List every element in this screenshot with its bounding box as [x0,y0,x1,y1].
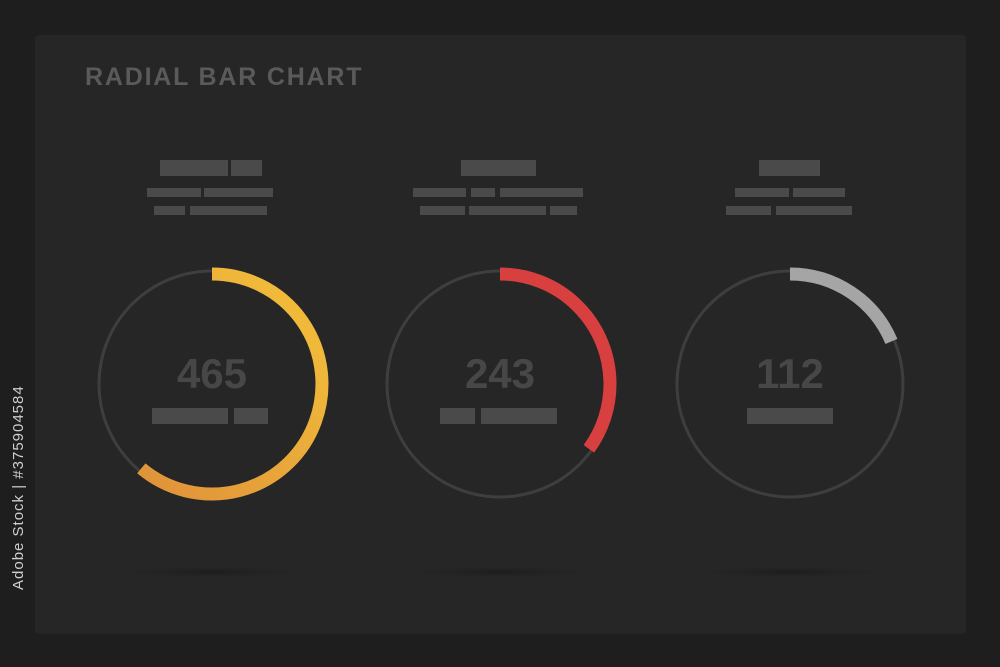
chart 2: 243: 243 [465,350,535,397]
shadows [102,565,900,579]
chart 2: 243 [387,271,613,497]
chart 1: 465 [99,271,325,497]
side watermark text: Adobe Stock | #375904584 [10,385,27,590]
chart 3: 112 [677,271,903,497]
chart 1: 465: 465 [177,350,247,397]
chart 3: 112: 112 [756,350,824,397]
title: RADIAL BAR CHART [85,63,363,91]
